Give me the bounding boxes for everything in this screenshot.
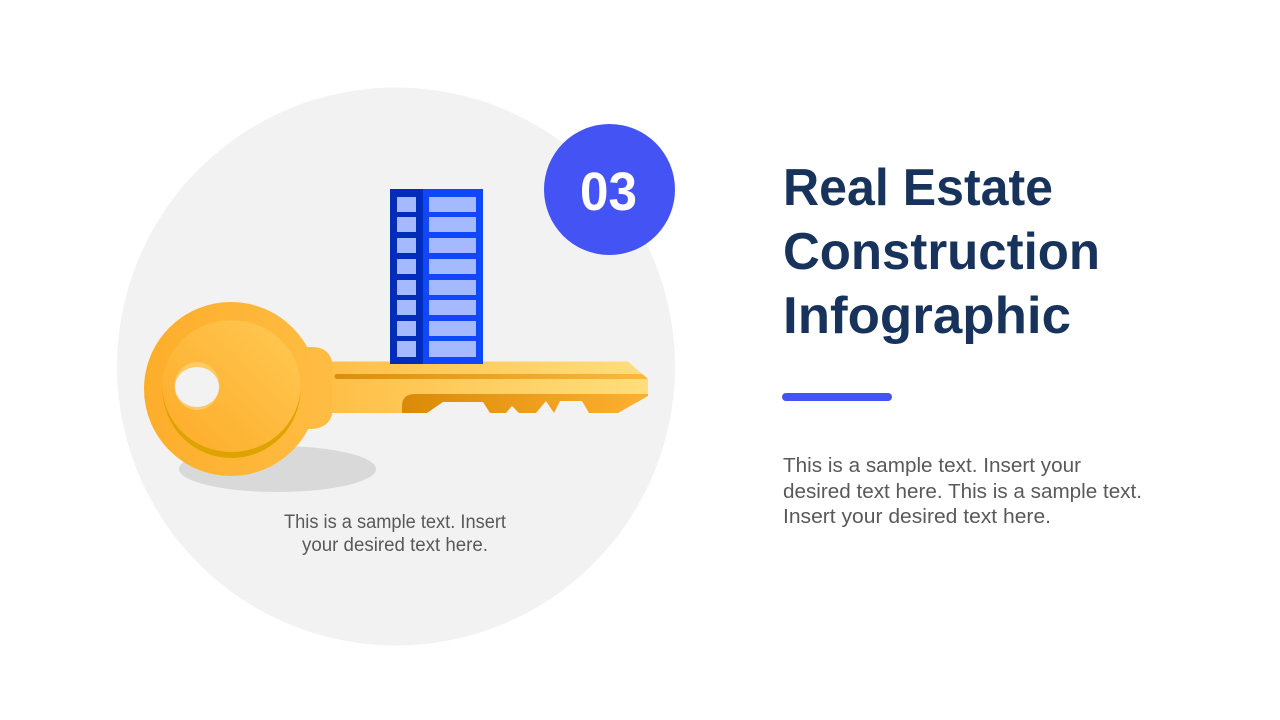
body text (783, 454, 1142, 528)
background circle panel (117, 88, 675, 646)
title (783, 159, 1100, 345)
key bit teeth (402, 394, 648, 413)
key shadow (179, 446, 376, 492)
key head inner disc (162, 320, 300, 452)
key collar (295, 347, 332, 429)
title: Infographic (783, 287, 1071, 345)
accent divider (782, 393, 892, 401)
caption under key (284, 512, 507, 556)
title: Construction (783, 223, 1100, 281)
key head inner rim (162, 320, 300, 458)
icon: gold key (144, 302, 648, 476)
caption under key: your desired text here. (302, 535, 488, 556)
body text: Insert your desired text here. (783, 505, 1051, 528)
key shaft (300, 362, 648, 413)
icon: building (390, 189, 483, 364)
body text: desired text here. This is a sample text. (783, 480, 1142, 503)
key groove (334, 374, 648, 379)
caption under key: This is a sample text. Insert (284, 512, 507, 533)
number badge (544, 124, 675, 255)
key hole (175, 367, 219, 407)
key hole highlight (174, 362, 220, 410)
body text: This is a sample text. Insert your (783, 454, 1081, 477)
title: Real Estate (783, 159, 1053, 217)
number badge: 03 (580, 162, 637, 222)
key head (144, 302, 318, 476)
